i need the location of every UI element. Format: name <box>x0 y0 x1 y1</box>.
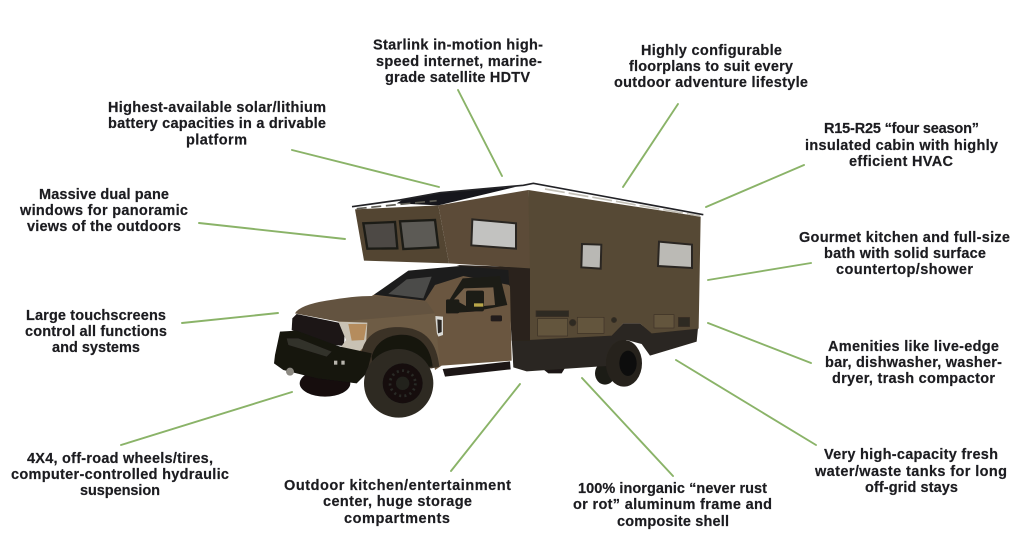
text: aluminum frame: or rot” aluminum frame and <box>573 497 772 513</box>
callout: amenities <box>708 323 1002 387</box>
fender and lower front body <box>338 313 440 370</box>
roof solar panels <box>397 187 517 205</box>
text: touchscreens: Large touchscreens <box>26 308 166 324</box>
callout: Starlink <box>373 38 543 176</box>
text: amenities: bar, dishwasher, washer- <box>825 355 1002 371</box>
text: kitchen and bath <box>799 230 1010 278</box>
text: dual pane windows: views of the outdoors <box>27 219 181 235</box>
text: water tanks: water/waste tanks for long <box>814 464 1007 480</box>
callout: solar and battery <box>108 100 439 187</box>
text: touchscreens: control all functions <box>25 324 167 340</box>
callout: dual pane windows <box>19 187 345 239</box>
text: dual pane windows <box>19 187 188 235</box>
leader line <box>582 378 673 476</box>
text: dual pane windows: windows for panoramic <box>19 203 188 219</box>
text: outdoor kitchen: Outdoor kitchen/entertainment <box>284 478 511 494</box>
windshield and dark roof <box>374 266 509 301</box>
text: kitchen and bath: countertop/shower <box>836 262 973 278</box>
text: outdoor kitchen: compartments <box>344 511 450 527</box>
text: wheels and suspension: computer-controlled hydraulic <box>11 467 229 483</box>
running board <box>443 361 511 377</box>
text: aluminum frame: composite shell <box>617 514 729 530</box>
rear wheel <box>606 340 642 387</box>
leader line <box>121 392 292 445</box>
camper lower dark band <box>512 323 698 371</box>
cab body <box>357 269 512 370</box>
undercarriage <box>543 368 565 373</box>
wheel arch <box>362 327 439 370</box>
leader line <box>706 165 804 207</box>
text: kitchen and bath: bath with solid surface <box>824 246 986 262</box>
truck illustration <box>274 183 703 418</box>
text: Starlink: grade satellite HDTV <box>385 70 530 86</box>
text: amenities: Amenities like live-edge <box>828 339 999 355</box>
text: wheels and suspension: suspension <box>80 483 160 499</box>
callout: floorplans <box>614 43 808 187</box>
text: kitchen and bath: Gourmet kitchen and full-size <box>799 230 1010 246</box>
callout: wheels and suspension <box>11 392 292 499</box>
front windows <box>363 220 438 249</box>
text: amenities <box>825 339 1002 387</box>
headlight <box>337 322 367 353</box>
storage hatches <box>536 311 690 336</box>
text: solar and battery: Highest-available solar/lithium <box>108 100 326 116</box>
text: solar and battery <box>108 100 326 148</box>
text: wheels and suspension <box>11 451 229 499</box>
text: touchscreens: and systems <box>52 340 140 356</box>
leader line <box>292 150 439 187</box>
text: floorplans: Highly configurable <box>641 43 782 59</box>
text: outdoor kitchen: center, huge storage <box>323 494 472 510</box>
text: Starlink: Starlink in-motion high- <box>373 38 543 54</box>
text: wheels and suspension: 4X4, off-road wheels/tires, <box>27 451 213 467</box>
callout: touchscreens <box>25 308 278 356</box>
door handle and badge <box>435 315 502 337</box>
camper side wall <box>528 190 701 340</box>
leader line <box>708 263 811 280</box>
text: dual pane windows: Massive dual pane <box>39 187 169 203</box>
side window 3 <box>658 242 692 268</box>
leader line <box>199 223 345 239</box>
callout: water tanks <box>676 360 1007 496</box>
text: water tanks: off-grid stays <box>865 480 958 496</box>
leader line <box>451 384 520 471</box>
far rear wheel <box>595 362 615 385</box>
callout: kitchen and bath <box>708 230 1010 280</box>
leader line <box>458 90 502 176</box>
side window 2 <box>581 244 601 269</box>
text: insulated cabin: R15-R25 “four season” <box>824 121 979 137</box>
text: solar and battery: battery capacities in a drivable <box>108 116 326 132</box>
text: floorplans: floorplans to suit every <box>629 59 793 75</box>
text: insulated cabin: insulated cabin with highly <box>805 138 998 154</box>
grille <box>292 314 345 346</box>
leader line <box>182 313 278 323</box>
text: insulated cabin: efficient HVAC <box>849 154 954 170</box>
cab recess <box>457 265 530 341</box>
text: floorplans <box>614 43 808 91</box>
leader line <box>676 360 816 445</box>
text: insulated cabin <box>805 121 998 170</box>
text: aluminum frame: 100% inorganic “never rust <box>578 481 767 497</box>
side mirror <box>446 291 484 313</box>
callout: outdoor kitchen <box>284 384 520 527</box>
text: touchscreens <box>25 308 167 356</box>
text: solar and battery: platform <box>186 132 247 148</box>
hood <box>295 296 435 322</box>
side window 1 <box>471 219 516 249</box>
leader line <box>708 323 811 363</box>
callout: aluminum frame <box>573 378 772 530</box>
overhang side face <box>438 190 530 268</box>
cab side window <box>446 276 507 313</box>
text: Starlink: speed internet, marine- <box>376 54 542 70</box>
text: floorplans: outdoor adventure lifestyle <box>614 75 808 91</box>
overhang front face <box>355 205 449 263</box>
front wheel <box>364 349 433 418</box>
text: aluminum frame <box>573 481 772 530</box>
text: outdoor kitchen <box>284 478 511 527</box>
far front wheel <box>300 370 350 397</box>
bull bar and bumper <box>274 331 372 383</box>
text: Starlink <box>373 38 543 86</box>
callout: insulated cabin <box>706 121 998 207</box>
text: amenities: dryer, trash compactor <box>832 371 995 387</box>
text: water tanks <box>814 447 1007 496</box>
leader line <box>623 104 678 187</box>
text: water tanks: Very high-capacity fresh <box>824 447 998 463</box>
roof rack <box>352 183 703 216</box>
